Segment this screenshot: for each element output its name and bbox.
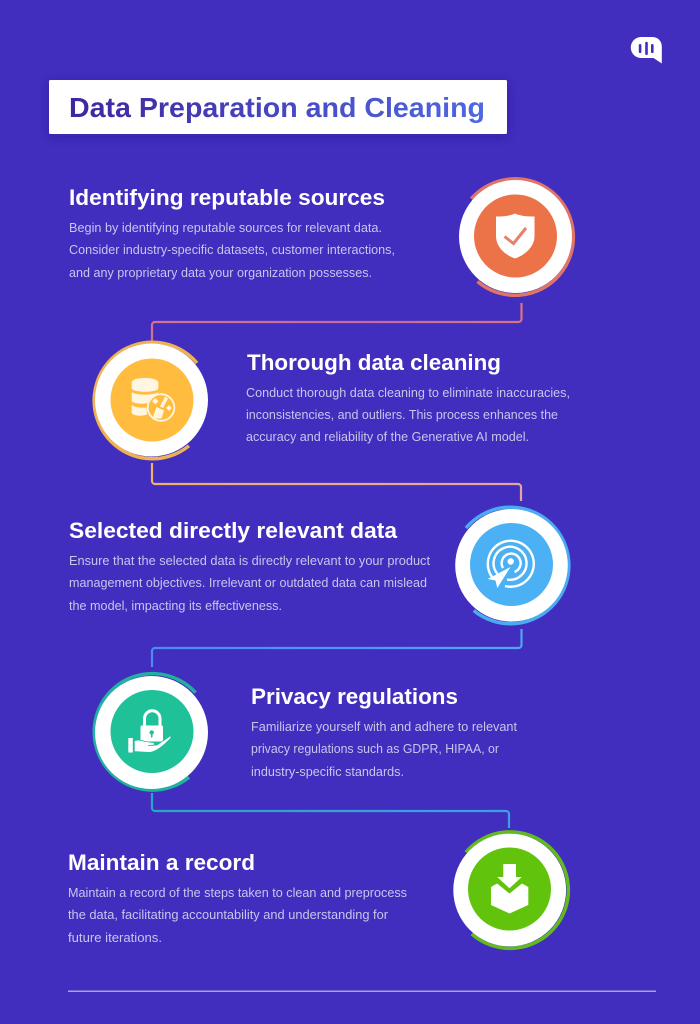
- title: Data Preparation and Cleaning: [69, 92, 485, 123]
- connector 3: [152, 629, 522, 667]
- step 5 body: Maintain a record of the steps taken to clean and preprocess: [68, 886, 407, 900]
- step 2 body: accuracy and reliability of the Generative AI model.: [246, 430, 529, 444]
- step 5 body: the data, facilitating accountability and understanding for: [68, 908, 388, 922]
- step 2 body: Conduct thorough data cleaning to eliminate inaccuracies,: [246, 386, 570, 400]
- step 3 body: [69, 554, 431, 613]
- connector 1: [152, 303, 522, 341]
- step 5 body: future iterations.: [68, 931, 162, 945]
- step 2 icon: database and broom: [94, 342, 208, 459]
- step 5 icon: download into box: [453, 832, 568, 948]
- open hand: [134, 736, 171, 752]
- step 5 heading: Maintain a record: [68, 850, 255, 875]
- step 1 icon: shield: [459, 179, 573, 295]
- step 4 icon: hand with padlock: [94, 674, 208, 790]
- step 2 heading: Thorough data cleaning: [247, 350, 501, 375]
- step 4 body: [251, 720, 517, 779]
- database: [132, 378, 158, 416]
- broom badge: [148, 394, 174, 421]
- step 5 text: [68, 850, 407, 945]
- connector 2: [152, 463, 521, 501]
- footer rule: [68, 990, 656, 992]
- step 3 body: Ensure that the selected data is directly relevant to your product: [69, 554, 431, 568]
- step 3 body: the model, impacting its effectiveness.: [69, 599, 282, 613]
- logo: speech bubble: [631, 37, 662, 64]
- step 1 body: Begin by identifying reputable sources for relevant data.: [69, 221, 382, 235]
- step 4 body: Familiarize yourself with and adhere to relevant: [251, 720, 517, 734]
- step 1 body: [69, 221, 395, 280]
- step 1 text: [69, 185, 395, 280]
- step 2 text: [246, 350, 570, 444]
- step 4 heading: Privacy regulations: [251, 684, 458, 709]
- title: [49, 80, 507, 134]
- step 1 heading: Identifying reputable sources: [69, 185, 385, 210]
- step 3 heading: Selected directly relevant data: [69, 518, 398, 543]
- step 2 body: [246, 386, 570, 444]
- step 3 text: [69, 518, 431, 613]
- step 4 body: industry-specific standards.: [251, 765, 404, 779]
- step 1 body: and any proprietary data your organization possesses.: [69, 266, 372, 280]
- step 1 body: Consider industry-specific datasets, customer interactions,: [69, 243, 395, 257]
- step 5 body: [68, 886, 407, 945]
- step 4 text: [251, 684, 517, 779]
- step 3 body: management objectives. Irrelevant or outdated data can mislead: [69, 576, 427, 590]
- step 3 icon: target with arrow: [455, 507, 569, 624]
- step 2 body: inconsistencies, and outliers. This process enhances the: [246, 408, 558, 422]
- step 4 body: privacy regulations such as GDPR, HIPAA, or: [251, 742, 499, 756]
- connector 4: [152, 793, 509, 828]
